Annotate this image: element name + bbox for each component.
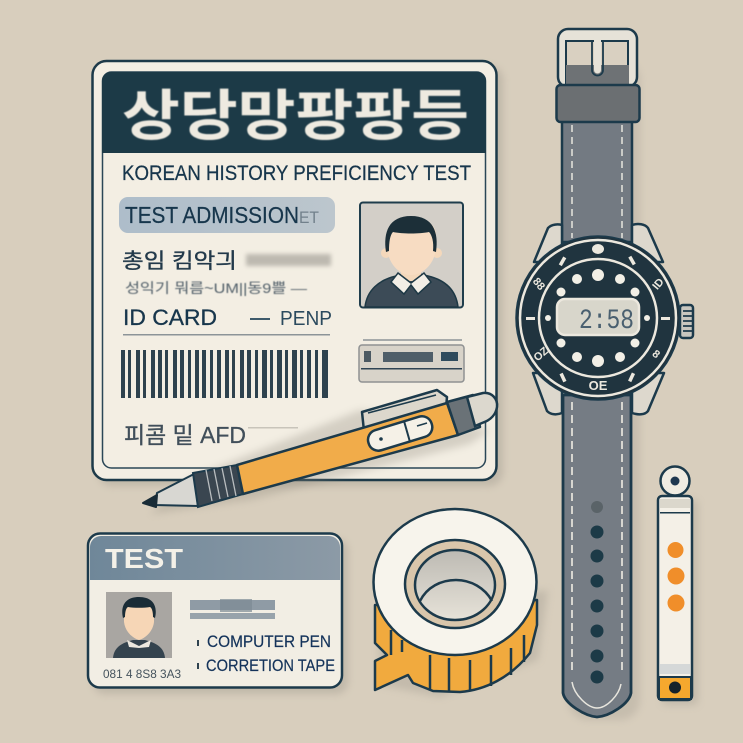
photo: small portrait: [106, 592, 172, 658]
buckle: [558, 29, 637, 87]
pen tip: [143, 474, 198, 507]
lower strap: [563, 395, 631, 717]
tape white face: [374, 509, 536, 655]
list text: correction tape: CORRETION TAPE: [206, 656, 335, 675]
card header band: [102, 72, 486, 153]
pen barrel: [237, 403, 458, 494]
strap holes: [590, 501, 604, 684]
tool top ring: [660, 466, 690, 496]
pen end ring: [447, 395, 480, 435]
tool orange base: [659, 677, 691, 699]
label pill: test admission: TEST ADMISSION: [125, 202, 299, 228]
bezel markers: 88: [530, 276, 547, 293]
digital display: 2:58: [579, 306, 634, 337]
text: Korean bottom line: 피콤 밑 AFD: [124, 422, 246, 448]
watch bezel: [516, 236, 680, 400]
upper strap: [562, 118, 632, 242]
label pill: test admission: ET: [299, 208, 319, 227]
text: ID card and pen: ID CARD: [123, 305, 217, 330]
bezel markers: OE: [589, 378, 608, 393]
tape core: [405, 540, 505, 628]
text: ID card and pen: PENP: [280, 308, 332, 330]
bezel markers: ID: [650, 276, 667, 292]
text: ID card and pen: [123, 305, 332, 336]
small device slot: [359, 340, 464, 382]
dial dots: [545, 269, 650, 367]
serial number: 081 4 8S8 3A3: [103, 667, 181, 681]
label pill: test admission: [119, 197, 335, 233]
subtitle: KOREAN HISTORY PREFICIENCY TEST: [122, 162, 471, 185]
icon: correction tape pen tool: [658, 466, 698, 705]
icon: wristwatch: [516, 29, 693, 720]
crown: [680, 305, 693, 338]
pen cap: [467, 393, 497, 426]
list text: computer pen: COMPUTER PEN: [207, 632, 331, 651]
icon: orange computer pen: [143, 390, 497, 514]
tool orange dots: [668, 542, 684, 612]
bezel markers: [526, 244, 670, 393]
tape orange side: [375, 600, 537, 692]
watch lugs: [533, 224, 664, 414]
heading: TEST: TEST: [105, 543, 183, 574]
barcode: [121, 350, 328, 398]
tape stripes: [391, 630, 524, 691]
blurred redacted bar: [246, 254, 331, 266]
panel: small ID card: [88, 534, 348, 694]
text: small smudged line: 성익기 뭐름~UM||동9쁠 —: [125, 280, 307, 296]
bezel markers: 8: [650, 348, 662, 361]
pen clip: [362, 390, 447, 431]
redacted name bars: [190, 599, 275, 619]
heading: Korean title: 상당망팡팡등: [122, 85, 469, 147]
digital display: [557, 299, 639, 337]
bezel markers: OZ: [532, 345, 551, 364]
icon: correction tape roll: [374, 509, 548, 697]
tool bands: [660, 499, 690, 508]
text: Korean info line: 총임 킴악긔: [122, 250, 237, 273]
panel: admission ticket card: [92, 61, 503, 486]
pen grip: [193, 465, 243, 507]
card header: [90, 536, 340, 580]
pen button: [366, 414, 435, 453]
strap keeper: [556, 85, 640, 122]
photo: applicant portrait: [360, 202, 463, 308]
tool body: [658, 496, 692, 700]
